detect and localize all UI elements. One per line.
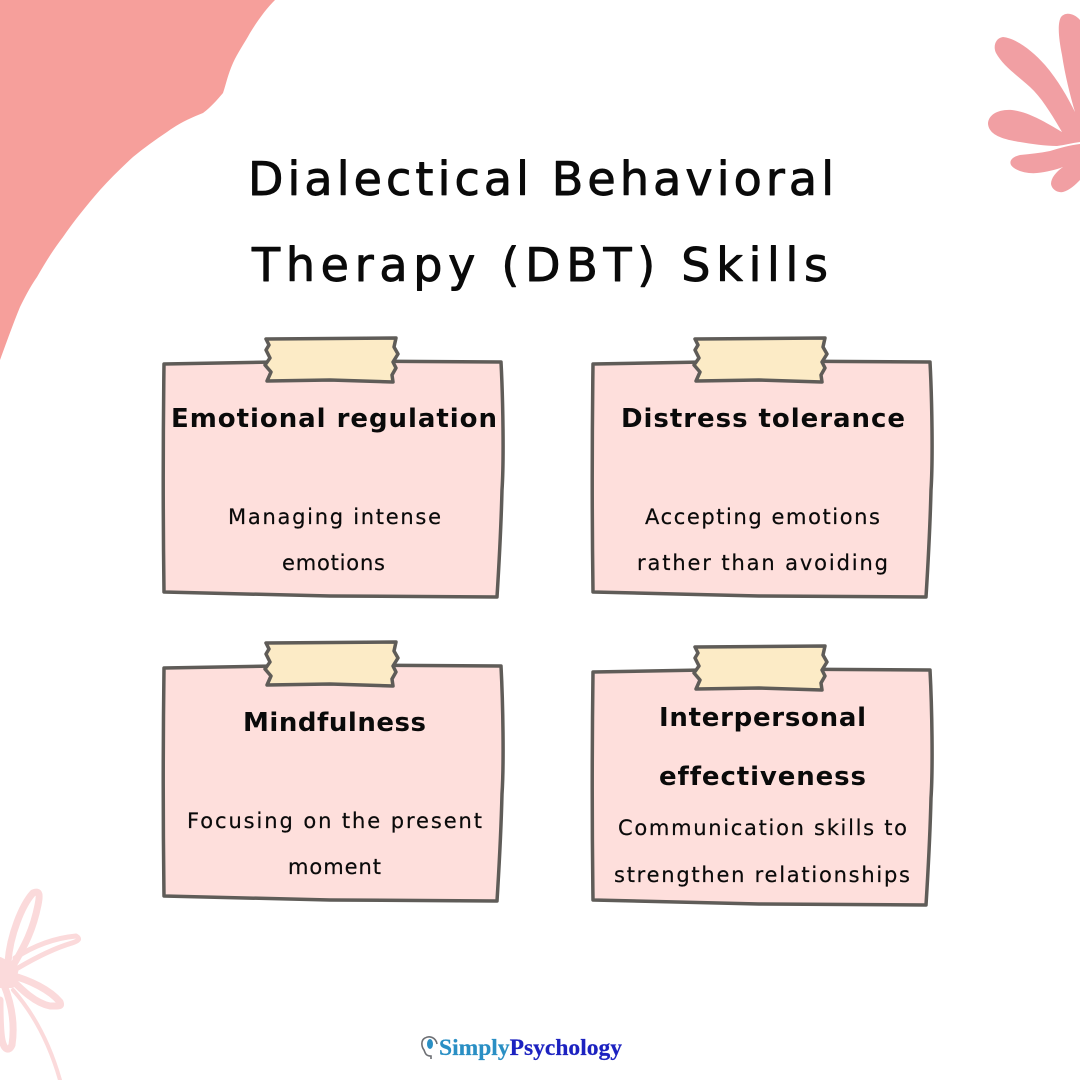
tape: distress tolerance (694, 338, 827, 382)
text: emotional regulation description: emotions (282, 551, 385, 575)
text: mindfulness description: moment (288, 855, 381, 879)
icon: head (422, 1037, 437, 1059)
text: emotional regulation description (228, 505, 441, 575)
text: mindfulness description: Focusing on the present (187, 809, 482, 833)
text: distress tolerance description: Accepting emotions (645, 505, 880, 529)
heading: interpersonal effectiveness: Interpersonal (659, 703, 866, 733)
flower: bottom left (0, 892, 79, 1080)
tape: mindfulness (265, 642, 398, 686)
heading: mindfulness: Mindfulness (243, 708, 426, 738)
text: mindfulness description (187, 809, 482, 879)
panel: mindfulness (163, 642, 503, 901)
torn paper shape: top left (0, 0, 275, 360)
text: logo wordmark: SimplyPsychology (439, 1035, 622, 1061)
title (248, 152, 834, 292)
text: distress tolerance description: rather than avoiding (637, 551, 888, 575)
text: interpersonal effectiveness description: Communication skills to (618, 816, 907, 840)
heading: distress tolerance: Distress tolerance (621, 404, 905, 434)
flower: top right (988, 14, 1080, 192)
panel: interpersonal effectiveness (592, 646, 932, 905)
panel: distress tolerance (592, 338, 932, 597)
text: interpersonal effectiveness description (614, 816, 910, 887)
tape: interpersonal effectiveness (694, 646, 827, 690)
text: emotional regulation description: Managing intense (228, 505, 441, 529)
logo: Simply Psychology (422, 1035, 622, 1061)
heading: interpersonal effectiveness (659, 703, 866, 792)
title: Therapy (DBT) Skills (251, 238, 828, 292)
panel: emotional regulation (163, 338, 503, 597)
text: distress tolerance description (637, 505, 888, 575)
heading: interpersonal effectiveness: effectiveness (659, 762, 866, 792)
text: interpersonal effectiveness description: strengthen relationships (614, 863, 910, 887)
tape: emotional regulation (265, 338, 398, 382)
title: Dialectical Behavioral (248, 152, 834, 206)
heading: emotional regulation: Emotional regulation (171, 404, 497, 434)
